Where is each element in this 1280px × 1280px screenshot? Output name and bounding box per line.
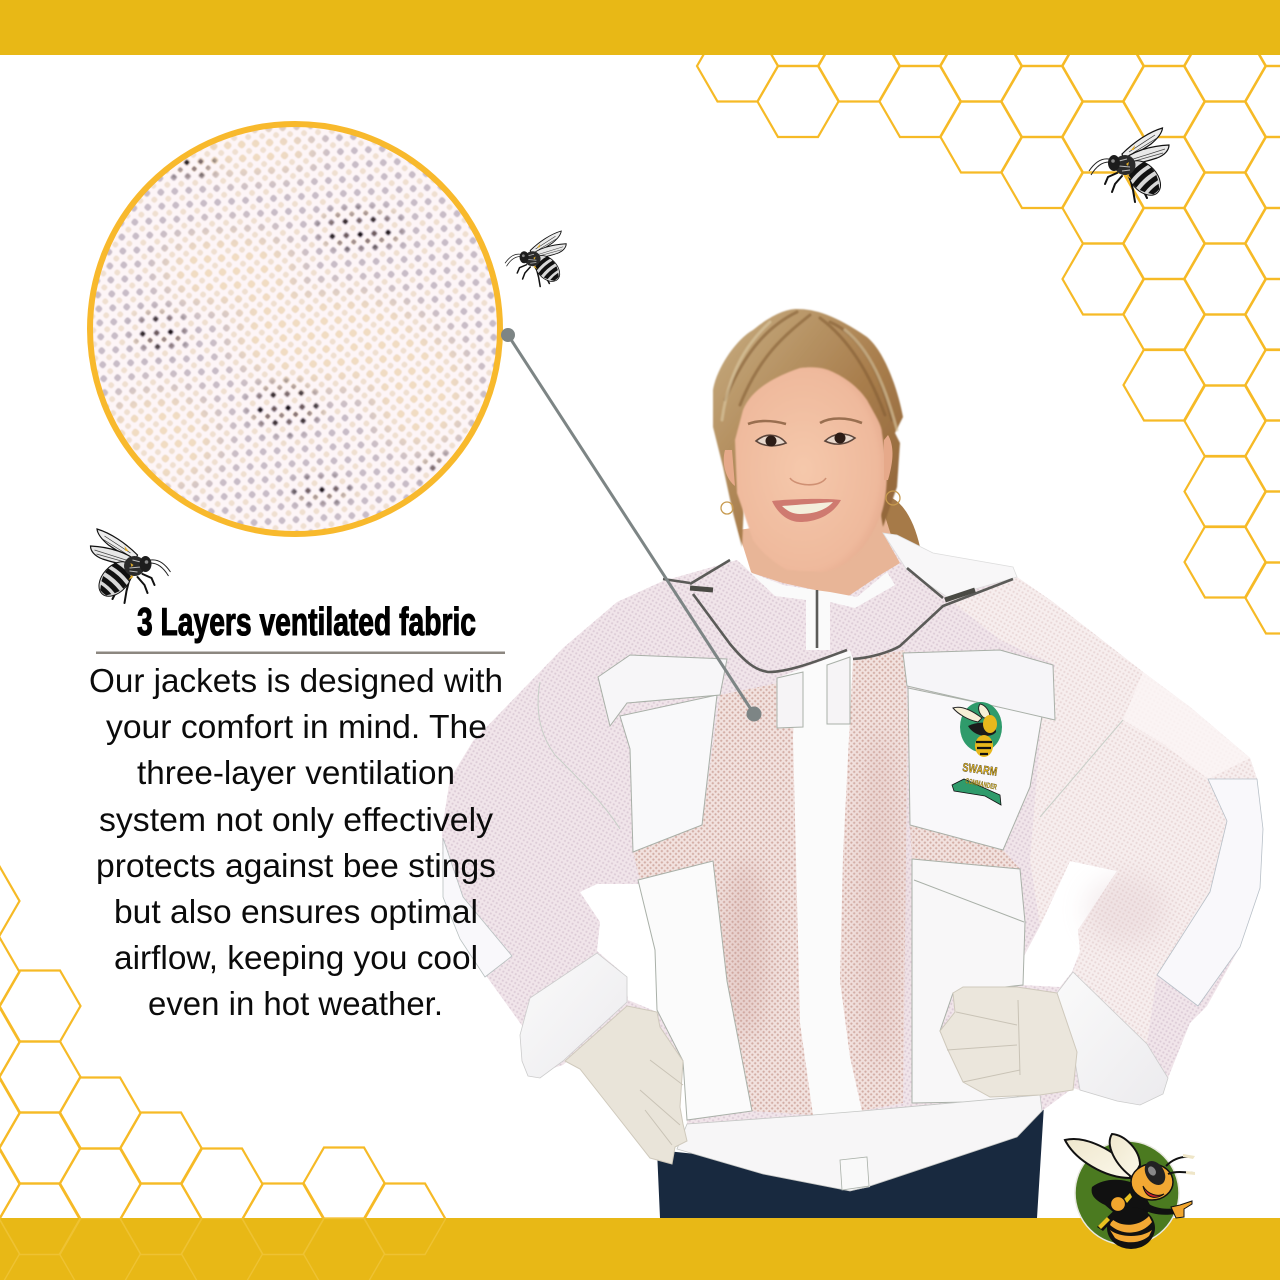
mesh shading [723,730,1165,1070]
bottom yellow bar [0,1218,1280,1280]
icon: bee above heading [90,529,170,603]
eyes and brows [748,418,862,446]
honeycomb pattern: top right [697,0,1280,634]
nose [790,478,826,485]
icon: bee on honeycomb [1089,128,1169,202]
body text: your comfort in mind. The [106,708,487,745]
body text: even in hot weather. [148,985,443,1022]
callout connector line [501,328,762,722]
jacket badge [952,702,1002,805]
right shoulder pale band [1123,672,1250,779]
body text [89,662,503,1022]
jeans [657,1105,1044,1218]
left pocket flap [598,655,727,726]
left elbow patch [443,838,512,977]
body text: airflow, keeping you cool [114,939,478,976]
body text: system not only effectively [99,801,494,838]
honeycomb pattern: bottom left [0,866,446,1254]
logo: Swarm Commander mascot [1065,1134,1195,1249]
jacket seams [538,682,1210,975]
left cuff [520,953,627,1078]
hair strands [722,312,897,430]
body text: three-layer ventilation [137,754,455,791]
hem velcro [840,1157,869,1190]
body text: Our jackets is designed with [89,662,503,699]
heading divider [96,652,505,654]
right pocket flap [903,650,1055,720]
badge wordmark: SWARM [962,760,998,779]
zip placket [777,650,870,1191]
right forearm patch [1157,779,1263,1006]
badge banner [952,779,1001,805]
icon: small bee near circle [505,231,566,286]
ponytail [874,495,920,547]
body text: protects against bee stings [96,847,496,884]
jacket hem [677,1095,1042,1191]
fabric close-up circle [87,121,503,537]
orange shirt [885,567,905,580]
body text: but also ensures optimal [114,893,478,930]
left glove [565,1006,687,1164]
torso mesh panels [633,650,1020,1115]
right lower pocket [912,859,1030,1103]
hood [883,533,1017,597]
smile [772,499,841,522]
neck [738,510,900,602]
left lower pocket [638,861,752,1120]
right upper pocket [908,688,1042,850]
hair [713,309,903,547]
right glove [940,987,1077,1097]
velcro tabs [777,657,850,728]
jacket silhouette with mesh fabric [442,533,1263,1191]
zippers and cords [663,560,1013,672]
person wearing bee jacket [442,309,1263,1218]
collar [737,560,895,650]
ears and earrings [724,435,892,486]
left upper pocket [620,695,717,852]
face [735,367,887,572]
top yellow bar [0,0,1280,55]
right cuff [1057,972,1168,1105]
right arm mesh [950,577,1257,1044]
heading: 3 Layers ventilated fabric [137,601,476,644]
badge wordmark lower: COMMANDER [965,776,998,792]
